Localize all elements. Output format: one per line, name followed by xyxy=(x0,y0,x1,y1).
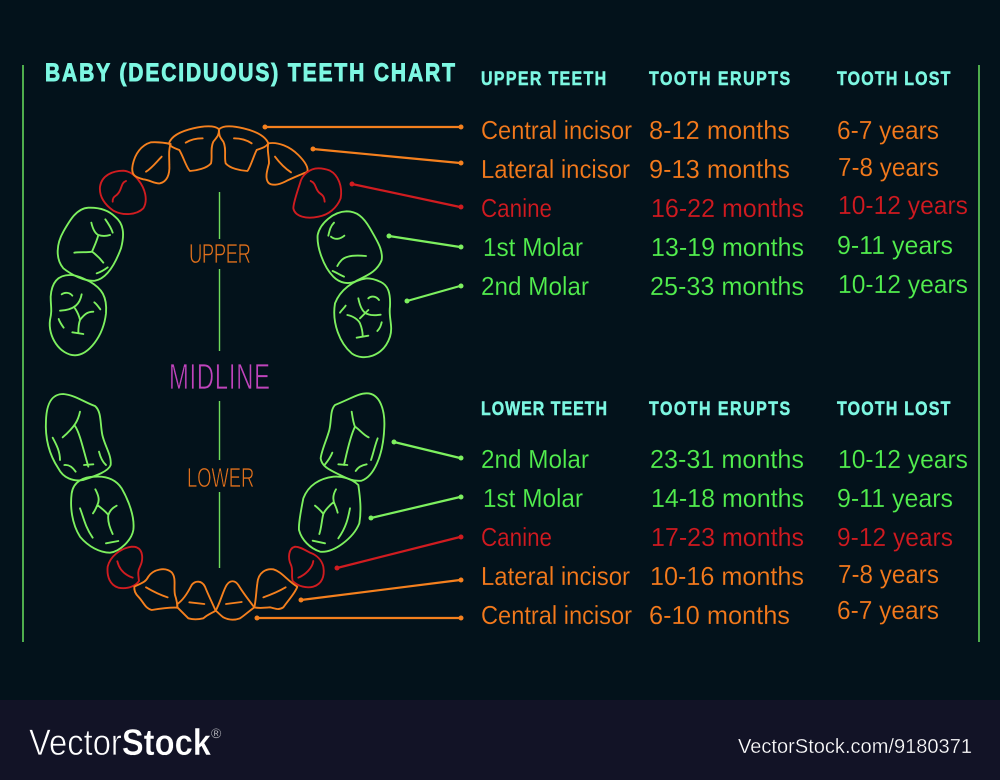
tooth: lower left central incisor xyxy=(177,582,216,619)
row: lateral incisor xyxy=(481,152,939,184)
tooth: upper right lateral incisor xyxy=(266,143,308,185)
row: 1st molar: 1st Molar xyxy=(483,232,583,262)
tooth: upper left lateral incisor xyxy=(132,142,171,183)
leader: upper lateral incisor xyxy=(310,146,464,166)
midline vertical segments xyxy=(218,192,220,568)
row: central incisor xyxy=(481,115,939,145)
row: 2nd molar: 2nd Molar xyxy=(481,444,589,474)
table: upper teeth xyxy=(481,68,968,301)
row: canine: 16-22 months xyxy=(651,193,804,223)
leader: upper 1st molar xyxy=(386,234,464,250)
row: lateral incisor: 10-16 months xyxy=(650,561,804,591)
row: lateral incisor: 7-8 years xyxy=(838,152,939,182)
row: 1st molar: 13-19 months xyxy=(651,232,804,262)
row: central incisor: Central incisor xyxy=(481,600,632,630)
tooth: upper left central incisor xyxy=(169,126,219,171)
column headings: upper: UPPER TEETH xyxy=(481,68,606,89)
row: central incisor: 6-7 years xyxy=(837,115,939,145)
leader: lower 1st molar xyxy=(368,494,464,520)
row: canine: 9-12 years xyxy=(837,522,953,552)
tooth: lower right 2nd molar xyxy=(321,393,384,481)
tooth: upper left 2nd molar xyxy=(50,275,106,355)
column headings: upper: TOOTH LOST xyxy=(837,68,951,89)
footer band xyxy=(0,700,1000,780)
row: 2nd molar: 10-12 years xyxy=(838,444,968,474)
table: lower teeth xyxy=(481,398,968,630)
dental chart: upper left teeth xyxy=(50,126,219,355)
row: lateral incisor: Lateral incisor xyxy=(481,561,630,591)
row: 1st molar: 14-18 months xyxy=(651,483,804,513)
row: 2nd molar: 23-31 months xyxy=(650,444,804,474)
tooth: lower right canine xyxy=(289,547,324,587)
label: lower: LOWER xyxy=(187,463,254,494)
row: canine xyxy=(481,522,953,552)
column headings: upper: TOOTH ERUPTS xyxy=(649,68,790,89)
title: BABY (DECIDUOUS) TEETH CHART xyxy=(45,58,455,86)
leader: lower lateral incisor xyxy=(298,578,464,602)
row: central incisor xyxy=(481,595,939,630)
row: 2nd molar: 2nd Molar xyxy=(481,271,589,301)
row: canine: 10-12 years xyxy=(838,190,968,220)
tooth: lower left 1st molar xyxy=(71,477,134,553)
row: central incisor: 8-12 months xyxy=(649,115,790,145)
column headings: upper xyxy=(481,68,951,89)
tooth: upper right 2nd molar xyxy=(334,278,391,357)
tooth: lower left 2nd molar xyxy=(46,394,111,480)
logo wordmark: VectorStock xyxy=(29,722,211,763)
left frame line xyxy=(22,65,24,642)
column headings: lower xyxy=(481,398,951,419)
tooth: lower left lateral incisor xyxy=(134,569,177,610)
tooth: upper left canine xyxy=(100,171,146,214)
dental chart: lower right teeth xyxy=(216,393,384,620)
row: canine xyxy=(481,190,968,223)
leader: lower central incisor xyxy=(254,616,464,620)
column headings: lower: TOOTH ERUPTS xyxy=(649,398,790,419)
row: 2nd molar: 10-12 years xyxy=(838,269,968,299)
row: canine: Canine xyxy=(481,522,552,552)
tooth: upper right canine xyxy=(293,168,341,218)
leader: upper 2nd molar xyxy=(404,284,464,304)
leader: upper central incisor xyxy=(262,124,464,130)
dental chart: lower left teeth xyxy=(46,394,216,619)
tooth: upper right 1st molar xyxy=(318,211,382,283)
tooth: lower right central incisor xyxy=(216,581,254,620)
column headings: lower: LOWER TEETH xyxy=(481,398,607,419)
row: 1st molar: 9-11 years xyxy=(837,230,953,260)
tooth: upper right central incisor xyxy=(219,126,268,171)
row: lateral incisor xyxy=(481,559,939,591)
row: 1st molar: 1st Molar xyxy=(483,483,583,513)
row: canine: 17-23 months xyxy=(651,522,804,552)
row: lateral incisor: 7-8 years xyxy=(838,559,939,589)
row: lateral incisor: Lateral incisor xyxy=(481,154,630,184)
leader: lower canine xyxy=(334,534,464,570)
column headings: lower: TOOTH LOST xyxy=(837,398,951,419)
tooth: lower right lateral incisor xyxy=(254,569,297,609)
tooth: lower right 1st molar xyxy=(299,477,360,552)
label: midline: MIDLINE xyxy=(169,357,270,397)
tooth: lower left canine xyxy=(107,547,142,588)
row: 1st molar xyxy=(483,230,953,262)
row: 2nd molar xyxy=(481,444,968,474)
row: lateral incisor: 9-13 months xyxy=(649,154,790,184)
registered mark: ® xyxy=(211,725,222,741)
row: 1st molar xyxy=(483,483,953,513)
row: canine: Canine xyxy=(481,193,552,223)
right frame line xyxy=(978,65,980,642)
label: upper: UPPER xyxy=(189,239,251,270)
leader: upper canine xyxy=(350,182,464,210)
image id: VectorStock.com/9180371 xyxy=(738,736,972,758)
row: 2nd molar: 25-33 months xyxy=(650,271,804,301)
row: central incisor: 6-7 years xyxy=(837,595,939,625)
leader: lower 2nd molar xyxy=(392,440,464,460)
row: central incisor: 6-10 months xyxy=(649,600,790,630)
row: central incisor: Central incisor xyxy=(481,115,632,145)
row: 2nd molar xyxy=(481,269,968,301)
row: 1st molar: 9-11 years xyxy=(837,483,953,513)
tooth: upper left 1st molar xyxy=(58,208,123,281)
dental chart: upper right teeth xyxy=(219,126,391,357)
